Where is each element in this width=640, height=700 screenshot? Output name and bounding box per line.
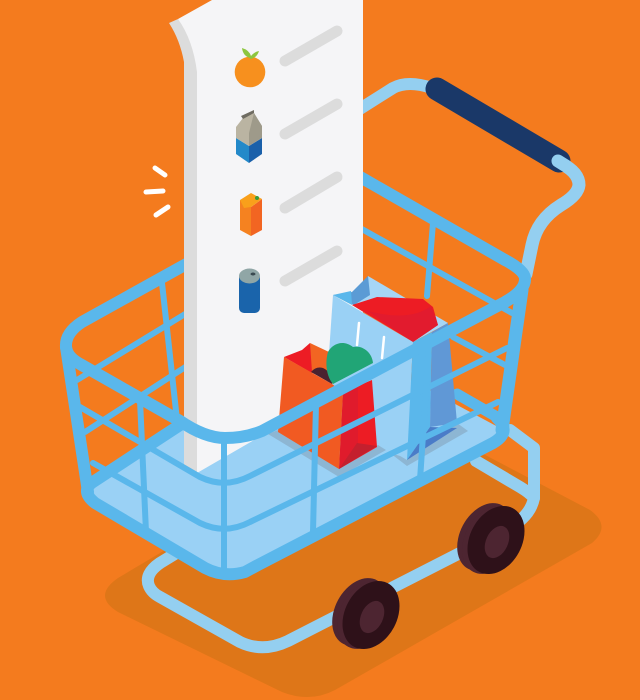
lower cart frame (148, 430, 534, 647)
bag side panels (407, 332, 432, 460)
cart ground shadow (105, 447, 602, 697)
icon: orange (235, 48, 265, 87)
green item (326, 343, 373, 384)
cart rear rails (66, 174, 512, 432)
floor rear band (457, 394, 497, 417)
icon: soda can (239, 268, 260, 313)
sparkle marks (146, 168, 168, 215)
dark item (311, 368, 332, 384)
icon: juice box (240, 193, 262, 236)
cart floor (85, 345, 500, 576)
cart corner posts (66, 290, 522, 492)
handle upright (526, 163, 579, 274)
red side face (339, 380, 377, 469)
wheel: front (321, 568, 411, 659)
icon: milk carton (236, 110, 262, 163)
paper sheet (178, 0, 363, 473)
cart handle bar (355, 84, 432, 112)
bag back panel (352, 276, 448, 342)
paper curl shadow (169, 19, 200, 473)
bag handles (357, 323, 359, 345)
cart front rails (80, 345, 507, 570)
bag shadows on floor (268, 423, 468, 477)
orange shopping bag (278, 343, 377, 469)
blue shopping bag (325, 276, 457, 460)
bag front panel (325, 295, 413, 460)
orange front face (278, 357, 343, 469)
list lines (285, 31, 337, 281)
wheel: rear (446, 493, 536, 584)
handle grip (437, 89, 559, 161)
cart top rim (66, 260, 525, 438)
handle tip (558, 161, 566, 166)
shopping list paper (169, 0, 363, 473)
orange bag interior (284, 343, 318, 375)
red contents (352, 297, 438, 342)
cart floor rim (87, 418, 504, 574)
